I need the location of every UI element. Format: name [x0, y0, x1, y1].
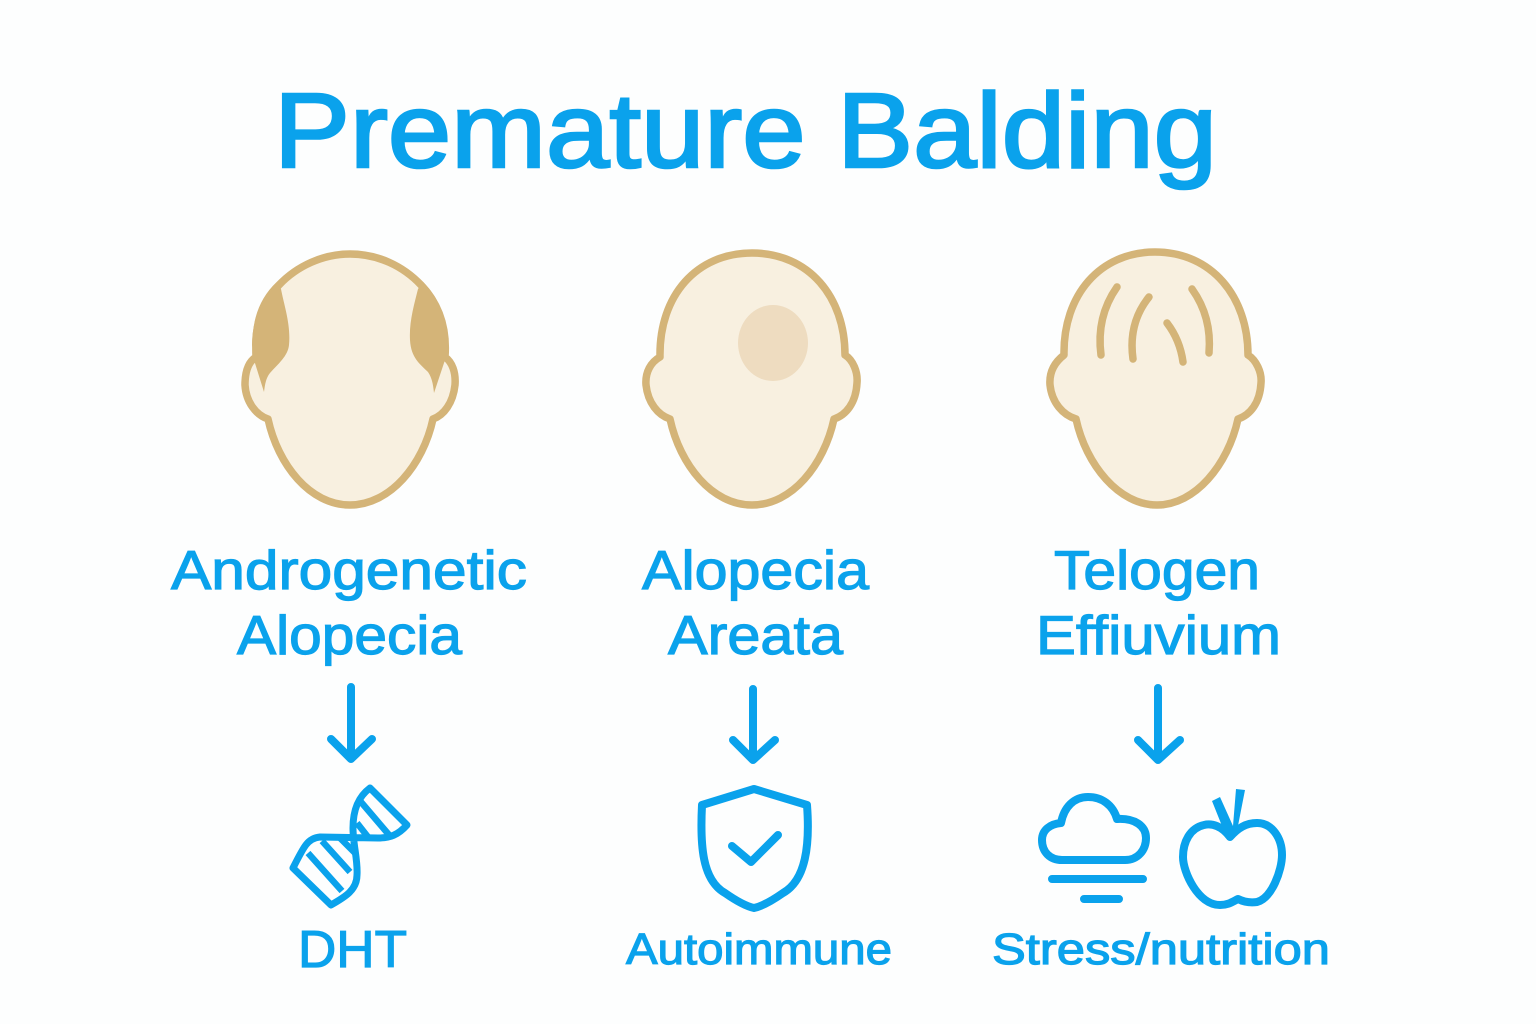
label: Telogen Effluvium: Effiuvium [1036, 604, 1281, 666]
label: Stress/nutrition: Stress/nutrition [992, 925, 1330, 974]
label: Alopecia Areata [642, 539, 869, 666]
label: Telogen Effluvium [1036, 539, 1281, 666]
icon: head with receding hairline [245, 254, 455, 505]
label: Alopecia Areata: Areata [668, 604, 843, 666]
arrow [733, 689, 775, 760]
icon: DNA [293, 788, 407, 905]
label: Androgenetic Alopecia: Androgenetic [171, 539, 527, 601]
icon: cloud [1042, 797, 1146, 899]
label: Telogen Effluvium: Telogen [1054, 539, 1260, 601]
panel: alopecia areata [626, 253, 892, 974]
icon: shield with check [701, 789, 808, 908]
label: Androgenetic Alopecia [171, 539, 527, 666]
label: Alopecia Areata: Alopecia [642, 539, 869, 601]
panel: telogen effluvium [992, 252, 1330, 974]
icon: head with thinning strands [1050, 252, 1261, 505]
label: Androgenetic Alopecia: Alopecia [237, 604, 462, 666]
icon: apple [1183, 789, 1282, 905]
panel: androgenetic alopecia [171, 254, 527, 979]
arrow [1138, 688, 1180, 760]
arrow [331, 687, 372, 759]
label: DHT: DHT [298, 921, 407, 979]
label: Autoimmune: Autoimmune [626, 925, 892, 974]
icon: head with bald patch [646, 253, 857, 505]
title: Premature Balding [274, 72, 1217, 190]
